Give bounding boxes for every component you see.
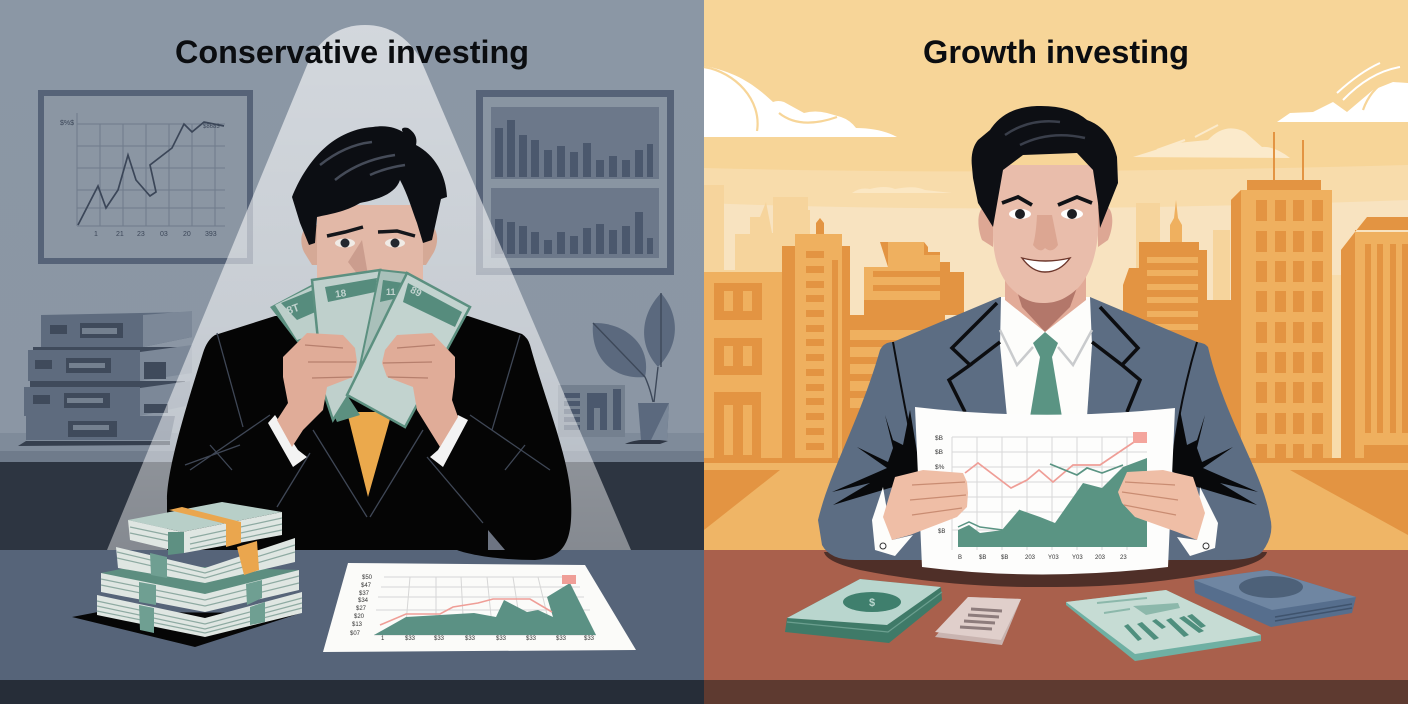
wall chart frame: 393	[205, 231, 217, 238]
icon: potted plant	[593, 293, 675, 444]
ground shadow shapes	[704, 458, 1408, 535]
far skyline right	[1136, 203, 1230, 310]
stack of cash	[72, 502, 302, 647]
document: line chart on desk: 1	[381, 636, 385, 642]
hair highlights	[1005, 121, 1085, 145]
wall bar charts frame	[476, 90, 674, 275]
hair	[292, 126, 447, 245]
brows	[1002, 197, 1092, 205]
cuff buttons	[880, 543, 1209, 549]
bottom bundle	[97, 592, 302, 637]
document: line chart on desk: $50	[362, 575, 373, 581]
suit	[167, 316, 571, 560]
cash bundle	[785, 579, 942, 643]
investor: worried man holding cash: 89	[408, 285, 423, 300]
clouds right	[1277, 63, 1408, 122]
document: line chart on desk: $07	[350, 631, 361, 637]
faint cloud	[852, 187, 952, 193]
dark lower wall	[0, 462, 704, 550]
tie	[1030, 332, 1062, 417]
clouds left	[704, 66, 897, 137]
ears	[301, 225, 437, 265]
document: line chart on desk	[323, 563, 636, 652]
lapels	[949, 303, 1140, 412]
document: line chart on desk: $20	[354, 614, 365, 620]
sleeve creases right	[1170, 410, 1258, 505]
document: held chart: $%	[935, 464, 945, 471]
nose	[1033, 215, 1058, 250]
collar outlines	[1000, 330, 1092, 365]
document: line chart on desk: $33	[526, 636, 537, 642]
sleeve creases left	[832, 410, 920, 505]
document: held chart: $B	[1001, 555, 1008, 561]
investor: worried man holding cash: 11	[386, 287, 396, 297]
right hand	[382, 333, 458, 447]
wall chart frame: 20	[183, 231, 191, 238]
face	[317, 205, 423, 290]
suit seams	[185, 333, 550, 523]
far skyline left	[704, 185, 810, 275]
shirt	[1000, 297, 1092, 417]
investor: smiling man holding chart	[818, 106, 1271, 574]
shadow	[72, 612, 301, 647]
jacket	[818, 297, 1271, 560]
document: line chart on desk: $33	[584, 636, 595, 642]
finger lines	[910, 482, 1178, 515]
sky bands	[704, 165, 1408, 210]
face shadow	[348, 240, 368, 275]
shirt cuffs	[872, 487, 1218, 556]
pale lower sky	[704, 200, 1408, 470]
ground	[704, 462, 1408, 550]
document: held chart: B	[958, 555, 962, 561]
ears	[978, 206, 1112, 247]
server stack	[18, 311, 192, 446]
finger lines	[305, 345, 435, 378]
smile	[1022, 258, 1070, 272]
dark notebook	[1194, 570, 1356, 627]
document: held chart: $B	[935, 435, 943, 442]
left hand	[883, 470, 968, 540]
brows and eyes	[327, 227, 415, 236]
investor: worried man holding cash: 18	[334, 288, 347, 301]
title: growth investing: Growth investing	[923, 34, 1189, 70]
small frame on shelf	[558, 385, 625, 437]
wall chart frame: 03	[160, 231, 168, 238]
sunset sky	[704, 0, 1408, 470]
document: held chart: 203	[1025, 555, 1036, 561]
title: conservative investing: Conservative investing	[175, 34, 529, 70]
eyes	[1009, 209, 1083, 219]
hair	[972, 106, 1118, 228]
document: line chart on desk: $33	[405, 636, 416, 642]
third bundle	[101, 565, 299, 612]
orange tie	[347, 412, 392, 497]
desk shadow edge	[704, 680, 1408, 704]
neck	[1005, 270, 1086, 332]
document: line chart on desk: $33	[465, 636, 476, 642]
wall chart frame: $8683	[203, 124, 220, 130]
banknotes fan	[270, 283, 340, 385]
wall chart frame	[38, 90, 253, 264]
neck	[332, 250, 410, 290]
wall chart frame: 23	[137, 231, 145, 238]
cash bundle: $	[869, 597, 875, 609]
document: held chart: 23	[1120, 555, 1127, 561]
skyline buildings right	[1123, 132, 1408, 465]
wall chart frame: 21	[116, 231, 124, 238]
document: held chart	[915, 407, 1175, 574]
shoulder seams	[893, 342, 1197, 467]
wall chart frame: $%$	[60, 120, 74, 127]
second bundle	[116, 538, 295, 583]
document: line chart on desk: $33	[434, 636, 445, 642]
top bundle	[128, 502, 282, 555]
document: held chart: $B	[935, 449, 943, 456]
desk	[704, 550, 1408, 681]
investor: worried man holding cash	[167, 126, 571, 560]
shirt cuffs	[268, 415, 468, 467]
document: held chart: Y03	[1072, 555, 1083, 561]
office wall background	[0, 0, 704, 704]
small cloud	[1133, 125, 1290, 158]
left hand	[277, 333, 357, 447]
desk front edge	[0, 680, 704, 704]
sliver between arm and torso	[488, 530, 505, 550]
skyline buildings left	[704, 218, 964, 462]
document: line chart on desk: $13	[352, 622, 363, 628]
shadow under man	[824, 552, 1267, 587]
face	[993, 165, 1098, 303]
investor: worried man holding cash: 8T	[285, 302, 302, 317]
document: held chart: Y03	[1048, 555, 1059, 561]
desk	[0, 550, 704, 681]
document: line chart on desk: $37	[359, 591, 370, 597]
neck shadow	[1015, 285, 1078, 332]
document: line chart on desk: $27	[356, 606, 367, 612]
hair highlights	[320, 142, 405, 180]
wall chart frame: 1	[94, 231, 98, 238]
spotlight beam	[107, 25, 631, 550]
panel: growth investing	[704, 0, 1408, 704]
document: line chart on desk: $47	[361, 583, 372, 589]
document: held chart: $B	[938, 529, 945, 535]
report booklet	[1066, 590, 1261, 661]
receipt card	[935, 597, 1021, 645]
document: line chart on desk: $34	[358, 598, 369, 604]
counter shelf	[0, 433, 704, 462]
document: held chart: $B	[979, 555, 986, 561]
document: line chart on desk: $33	[496, 636, 507, 642]
document: held chart: 203	[1095, 555, 1106, 561]
right hand	[1118, 470, 1205, 540]
panel: conservative investing	[0, 0, 704, 704]
document: line chart on desk: $33	[556, 636, 567, 642]
